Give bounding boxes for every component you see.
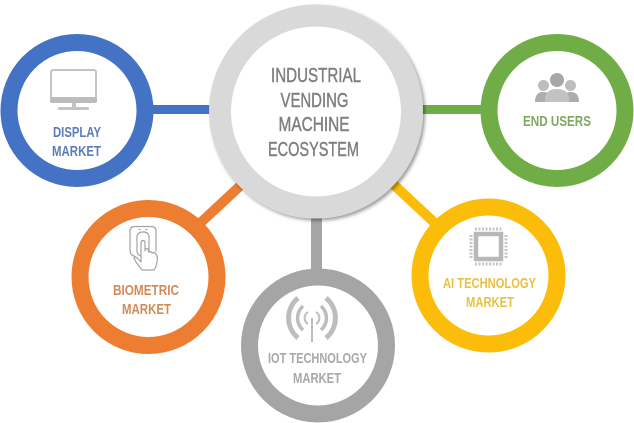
hub title: INDUSTRIAL [271, 65, 361, 87]
display label: MARKET [52, 143, 101, 160]
IoT label: IOT TECHNOLOGY [268, 350, 367, 367]
IoT label [268, 350, 367, 387]
biometric label: MARKET [122, 301, 171, 318]
connector: AI technology to centre [393, 184, 438, 226]
connector: IoT technology to centre [311, 212, 322, 272]
IoT ring [250, 277, 386, 414]
icon: monitor [50, 70, 97, 110]
connector: biometric to centre [196, 186, 240, 227]
biometric ring [80, 208, 217, 346]
icon: users group [535, 73, 579, 102]
connector: end users to centre [418, 105, 484, 114]
panel: biometric market [80, 208, 217, 346]
end users label: END USERS [523, 113, 591, 130]
hub ring [220, 16, 412, 208]
hub title: MACHINE [278, 114, 350, 136]
AI label [443, 275, 536, 311]
IoT label: MARKET [293, 370, 341, 387]
display ring [9, 42, 145, 178]
display label: DISPLAY [53, 124, 101, 141]
connector: display to centre [150, 105, 215, 114]
icon: fingerprint touch [130, 226, 157, 270]
AI label: AI TECHNOLOGY [443, 275, 536, 292]
hub title: ECOSYSTEM [268, 139, 359, 161]
hub title [268, 65, 361, 161]
AI ring [420, 207, 557, 344]
panel: display market [9, 42, 145, 178]
panel: end users [489, 42, 625, 178]
AI label: MARKET [466, 294, 514, 311]
icon: chip [471, 229, 506, 264]
biometric label: BIOMETRIC [113, 282, 179, 299]
end users ring [489, 42, 625, 178]
panel: IoT technology market [250, 277, 386, 414]
hub title: VENDING [280, 90, 348, 112]
icon: antenna signal [289, 298, 335, 342]
panel: AI technology market [420, 207, 557, 344]
biometric label [113, 282, 179, 318]
display label [52, 124, 101, 160]
panel: central hub [220, 16, 412, 208]
